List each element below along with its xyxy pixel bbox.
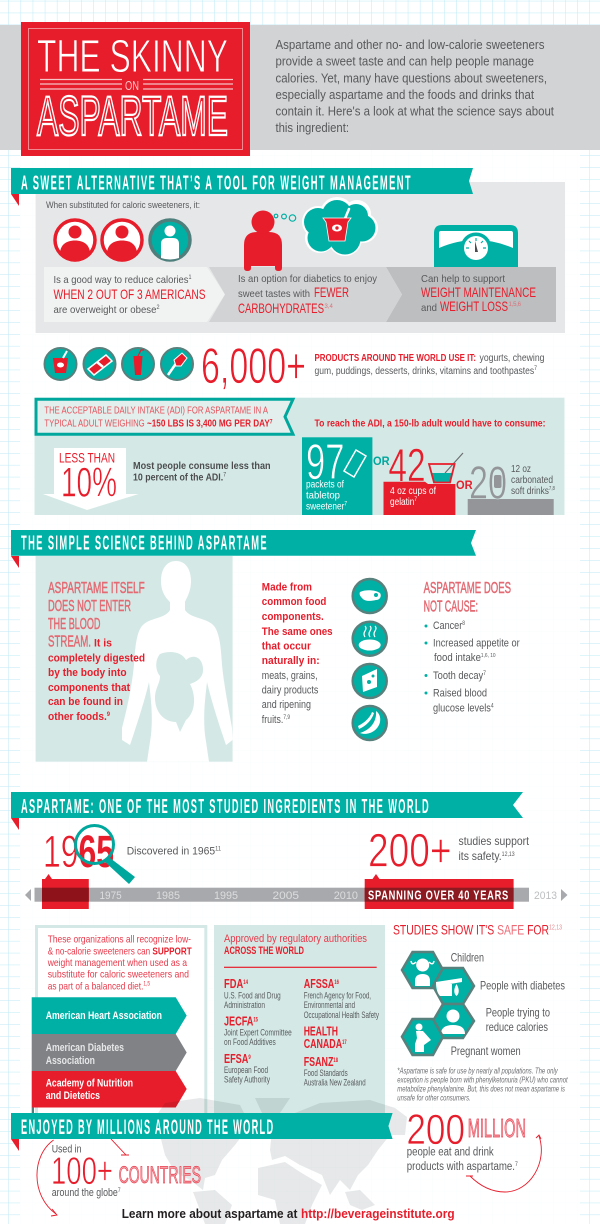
intro text: this ingredient: — [276, 120, 349, 135]
left authorities: 9 — [248, 1055, 251, 1061]
left authorities: U.S. Food and Drug — [224, 991, 281, 1001]
text: aspartame does not cause: Raised blood — [433, 688, 487, 700]
chevron row — [44, 267, 556, 322]
box: 42 cups of gelatin: 7 — [414, 497, 418, 503]
right authorities: 16 — [334, 980, 339, 986]
text: organizations recognize: substitute for caloric sweeteners and — [48, 969, 189, 981]
title box: ON — [125, 78, 139, 93]
text: studies support: its safety. — [458, 849, 508, 863]
stat: 100+ countries: COUNTRIES — [119, 1162, 201, 1189]
text: aspartame does not cause: food intake — [434, 652, 488, 664]
text: studies support — [458, 834, 530, 863]
text: does not enter blood stream: STREAM. — [48, 634, 91, 651]
text: aspartame does not cause: Increased appetite or — [433, 638, 520, 650]
ribbon heading: enjoyed by millions: ENJOYED BY MILLIONS AROUND THE WORLD — [21, 1116, 274, 1139]
text: organizations recognize — [47, 934, 192, 992]
right authorities: Environmental and — [304, 1000, 355, 1010]
text: made from common food components: naturally in: — [262, 655, 320, 667]
arrow: American Diabetes Association — [32, 1034, 187, 1071]
text: diabetics: FEWER — [314, 284, 349, 300]
footnote — [397, 1065, 568, 1102]
right authorities: AFSSA — [304, 976, 348, 991]
text: does not enter blood stream: components that — [48, 682, 130, 694]
box: 20 soft drinks — [468, 456, 555, 515]
text: aspartame does not cause: glucose levels — [433, 703, 502, 715]
header band — [0, 22, 600, 156]
text: aspartame does not cause — [424, 580, 520, 715]
hexagon labels: Children — [451, 951, 484, 965]
text: most people: 7 — [223, 473, 227, 479]
text: made from common food components: fruits. — [262, 714, 289, 726]
text: discovered: 11 — [215, 846, 222, 852]
right authorities: Occupational Health Safety — [304, 1010, 379, 1020]
box: 42 cups of gelatin: 42 — [388, 439, 426, 491]
icon: chewing gum — [84, 348, 116, 380]
icon: meat — [353, 579, 387, 613]
text: weight maintenance: 1,5,6 — [508, 302, 522, 308]
footer link: http://beverageinstitute.org — [301, 1206, 455, 1221]
text: made from common food components: common food — [262, 596, 326, 608]
box: 97 packets: 97 — [306, 434, 344, 490]
icon: diabetes hexagon — [433, 968, 474, 1004]
marker: spanning over 40 years — [365, 874, 514, 909]
title box — [21, 22, 250, 156]
text: diabetics — [238, 273, 378, 316]
text: diabetics: sweet tastes with — [238, 288, 310, 300]
arrow: Academy of Nutrition and Dietetics — [32, 1071, 187, 1108]
left authorities: Administration — [224, 1000, 265, 1010]
ADI ribbon — [36, 399, 293, 434]
text: weight maintenance: and — [421, 302, 437, 314]
hexagon labels: reduce calories — [486, 1020, 548, 1034]
footer link: Learn more about aspartame at — [122, 1206, 298, 1221]
text: products: gum, puddings, desserts, drinks, vitamins and toothpastes — [314, 366, 572, 377]
panel: weight management — [36, 182, 565, 333]
box: 42 cups of gelatin: 4 oz cups of — [390, 485, 436, 497]
arrow: less than 10% — [43, 448, 138, 510]
timeline years: 1975 — [100, 890, 122, 902]
right authorities: HEALTH — [304, 1024, 338, 1039]
box: 20 soft drinks: carbonated — [511, 474, 553, 486]
arrow: less than 10%: LESS THAN — [59, 450, 115, 466]
footnote: unsafe for other consumers. — [397, 1092, 471, 1102]
timeline — [25, 824, 568, 909]
right authorities: French Agency for Food, — [304, 991, 371, 1001]
stat: 200 million — [406, 1106, 541, 1192]
text: made from common food components: The same ones — [262, 626, 333, 638]
text: studies support: studies support — [458, 834, 530, 848]
intro line: When substituted for caloric sweeteners, it: — [46, 200, 200, 211]
hexagon labels: Pregnant women — [451, 1044, 521, 1058]
text: aspartame does not cause: Tooth decay — [433, 670, 492, 682]
text: most people: 10 percent of the ADI. — [133, 472, 241, 484]
text: does not enter blood stream: DOES NOT ENTER — [48, 598, 131, 615]
intro text — [276, 37, 554, 135]
ribbon heading: most studied — [11, 792, 523, 830]
text: most people: Most people consume less than — [133, 460, 271, 472]
timeline years — [100, 890, 557, 902]
text: aspartame does not cause: 7 — [483, 671, 487, 677]
intro text: especially aspartame and the foods and drinks that — [276, 87, 534, 102]
text: does not enter blood stream — [48, 580, 145, 723]
panel: regulatory authorities — [214, 925, 385, 1115]
timeline years: 1985 — [156, 890, 180, 902]
box: 97 packets: 7 — [344, 502, 348, 508]
icon: yogurt — [44, 348, 76, 380]
text: made from common food components: components. — [262, 611, 324, 623]
ribbon heading: sweet alternative — [11, 168, 473, 206]
left authorities: EFSA — [224, 1051, 259, 1066]
text: made from common food components — [262, 582, 333, 726]
text: organizations recognize: & no-calorie sweeteners can SUPPORT — [48, 945, 192, 957]
right authorities: Food Standards — [304, 1068, 348, 1078]
box: 20 soft drinks: 7,8 — [549, 486, 555, 492]
stat: 100+ countries: Used in — [52, 1143, 82, 1155]
icon: toothbrush — [161, 348, 193, 380]
text: diabetics: CARBOHYDRATES — [238, 300, 324, 316]
icon: drink — [122, 348, 154, 380]
text: weight maintenance: WEIGHT MAINTENANCE — [421, 284, 536, 300]
text: does not enter blood stream: can be found in — [48, 696, 123, 708]
text: aspartame does not cause: ASPARTAME DOES — [424, 580, 511, 597]
intro text: Aspartame and other no- and low-calorie sweeteners — [276, 37, 545, 52]
text: products: yogurts, chewing — [480, 353, 544, 364]
panel: body silhouette — [36, 556, 233, 762]
label: or: OR — [373, 454, 390, 468]
arrow: American Diabetes Association: Association — [46, 1055, 95, 1067]
text: organizations recognize: weight management when used as a — [47, 957, 187, 969]
heading: studies show: STUDIES SHOW IT'S SAFE FOR — [393, 921, 558, 937]
label: or: OR — [456, 478, 473, 492]
left authorities: on Food Additives — [224, 1037, 276, 1047]
stat: 200+: 200+ — [368, 824, 452, 877]
heading: approved: ACROSS THE WORLD — [224, 945, 304, 957]
stat: 200 million: MILLION — [468, 1113, 526, 1143]
stat: 200 million: 200 — [406, 1106, 465, 1154]
right authorities: 18 — [333, 1058, 338, 1064]
text: aspartame does not cause: 8 — [462, 621, 466, 627]
box: 97 packets: sweetener — [306, 500, 354, 512]
box: 20 soft drinks: soft drinks — [511, 485, 559, 497]
box: 97 packets — [302, 434, 372, 515]
ribbon heading: simple science: THE SIMPLE SCIENCE BEHIND ASPARTAME — [21, 532, 268, 554]
left authorities: 14 — [243, 980, 248, 986]
footer link — [122, 1206, 455, 1221]
text: made from common food components: dairy products — [262, 685, 319, 697]
left authorities: Joint Expert Committee — [224, 1028, 292, 1038]
arrow: Academy of Nutrition and Dietetics: Academy of Nutrition — [46, 1078, 133, 1090]
text: reduce calories — [54, 274, 206, 316]
stat: 6,000+: 6,000+ — [201, 338, 306, 394]
text: does not enter blood stream: It is — [94, 638, 112, 650]
text: organizations recognize: 1,5 — [143, 981, 151, 987]
left authorities — [224, 976, 292, 1085]
ribbon heading: enjoyed by millions — [11, 1113, 393, 1151]
marker: spanning over 40 years: SPANNING OVER 40 YEARS — [368, 888, 509, 902]
title box: THE SKINNY — [37, 30, 228, 82]
box: 20 soft drinks: 20 — [469, 456, 507, 508]
timeline bar — [34, 888, 529, 902]
left authorities: Safety Authority — [224, 1075, 270, 1085]
hexagon labels — [451, 951, 565, 1058]
text: does not enter blood stream: by the body into — [48, 667, 127, 679]
box: 20 soft drinks: 12 oz — [511, 463, 531, 475]
text: reduce calories: WHEN 2 OUT OF 3 AMERICANS — [54, 286, 206, 302]
right authorities — [304, 976, 379, 1088]
body figure — [122, 561, 233, 762]
text: weight maintenance — [421, 273, 536, 314]
ribbon heading: simple science — [11, 530, 476, 568]
icon: bread — [353, 622, 387, 656]
icon: bananas — [353, 706, 387, 740]
box: 42 cups of gelatin — [384, 439, 463, 515]
text: weight maintenance: WEIGHT LOSS — [440, 298, 508, 314]
text: diabetics: 3,4 — [324, 304, 334, 310]
text: made from common food components: and ripening — [262, 699, 311, 711]
text: made from common food components: 7,9 — [283, 715, 291, 721]
text: reduce calories: 1 — [189, 275, 192, 281]
intro text: calories. Yet, many have questions about sweeteners, — [276, 70, 547, 85]
world map — [150, 1098, 407, 1224]
text: aspartame does not cause: 4 — [491, 704, 494, 710]
right authorities: FSANZ — [304, 1054, 347, 1069]
stat: 200 million: people eat and drink — [407, 1147, 494, 1159]
text: studies support: 12,13 — [502, 852, 515, 858]
text: reduce calories: are overweight or obese — [54, 304, 166, 316]
text: diabetics: Is an option for diabetics to enjoy — [238, 273, 378, 285]
stat: 100+ countries — [37, 1139, 201, 1216]
timeline years: 2005 — [272, 890, 299, 902]
icon: cheese — [353, 664, 387, 698]
timeline years: 2010 — [334, 890, 358, 902]
ADI ribbon: 7 — [270, 420, 273, 426]
ADI ribbon: TYPICAL ADULT WEIGHING — [44, 418, 145, 430]
products row — [44, 338, 544, 394]
text: organizations recognize: These organizations all recognize low- — [48, 934, 191, 946]
icon: person hexagon — [433, 1004, 474, 1038]
text: aspartame does not cause: 1,6, 10 — [481, 653, 496, 659]
icon: two of three people — [55, 220, 190, 262]
text: made from common food components: meats, grains, — [262, 670, 318, 682]
timeline years: 1995 — [214, 890, 238, 902]
text: does not enter blood stream: completely digested — [48, 653, 145, 665]
text: reduce calories: 2 — [156, 305, 160, 311]
left authorities: JECFA — [224, 1014, 266, 1029]
text: most people — [133, 460, 271, 484]
panel: acceptable daily intake — [34, 398, 564, 515]
text: made from common food components: Made from — [262, 582, 312, 594]
stat: 100+ countries: 7 — [118, 1188, 121, 1194]
intro text: provide a sweet taste and can help people manage — [276, 54, 534, 69]
arrow: Academy of Nutrition and Dietetics: and Dietetics — [46, 1090, 100, 1102]
text: weight maintenance: Can help to support — [421, 273, 505, 285]
text: reduce calories: Is a good way to reduce calories — [54, 274, 204, 286]
intro text: contain it. Here's a look at what the science says about — [276, 104, 554, 119]
text: does not enter blood stream: 9 — [107, 712, 111, 718]
stat: 100+ countries: around the globe — [52, 1187, 134, 1199]
arrow: American Diabetes Association: American Diabetes — [46, 1042, 124, 1054]
text: products: PRODUCTS AROUND THE WORLD USE IT: — [314, 353, 476, 364]
box: 42 cups of gelatin: gelatin — [390, 496, 421, 508]
text: does not enter blood stream: ASPARTAME ITSELF — [48, 580, 145, 597]
stat: 200 million: products with aspartame. — [407, 1161, 535, 1173]
text: products: 7 — [534, 366, 538, 372]
ADI ribbon: ~150 LBS IS 3,400 MG PER DAY — [147, 419, 298, 430]
arrow: less than 10%: 10% — [61, 459, 117, 506]
hexagon labels: People trying to — [486, 1006, 550, 1020]
stat: 1965 with magnifier: 1965 — [43, 826, 114, 877]
text: aspartame does not cause: Cancer — [433, 620, 468, 632]
icon: scale — [434, 225, 518, 267]
icon: person thinking of drink — [244, 197, 378, 271]
right authorities: Australia New Zealand — [304, 1078, 366, 1088]
left authorities: European Food — [224, 1065, 268, 1075]
box: 97 packets: tabletop — [306, 490, 340, 502]
right authorities: CANADA — [304, 1036, 360, 1051]
box: 97 packets: packets of — [306, 479, 344, 491]
text: organizations recognize: as part of a balanced diet. — [48, 980, 169, 992]
heading: approved — [224, 933, 367, 957]
title box: ASPARTAME — [37, 84, 228, 147]
text: aspartame does not cause: NOT CAUSE: — [424, 599, 478, 616]
text: made from common food components: that occur — [262, 641, 312, 653]
left authorities: 15 — [253, 1018, 258, 1024]
arrow: American Heart Association: American Heart Association — [46, 1010, 162, 1022]
heading: to reach the ADI: To reach the ADI, a 150-lb adult would have to consume: — [314, 418, 546, 430]
stat: 200 million: 7 — [515, 1162, 518, 1168]
icon: pregnant hexagon — [402, 1019, 443, 1055]
heading: studies show: 12,13 — [549, 924, 562, 931]
right authorities: 17 — [342, 1040, 347, 1046]
organs — [155, 652, 203, 732]
icon: child hexagon — [402, 952, 443, 988]
panel: organizations — [32, 926, 206, 1116]
text: does not enter blood stream: THE BLOOD — [48, 616, 100, 633]
ADI ribbon: THE ACCEPTABLE DAILY INTAKE (ADI) FOR ASPARTAME IN A — [44, 405, 268, 417]
text: products — [314, 353, 544, 377]
timeline years: 2013 — [534, 890, 557, 902]
marker: 1965 — [42, 874, 89, 909]
panel: safe for — [393, 921, 568, 1102]
hexagon labels: People with diabetes — [480, 978, 565, 992]
arrow: American Heart Association — [32, 997, 187, 1034]
text: does not enter blood stream: other foods. — [48, 711, 112, 723]
text: discovered: Discovered in 1965 — [127, 845, 221, 857]
left authorities: FDA — [224, 976, 251, 991]
stat: 100+ countries: 100+ — [51, 1150, 113, 1193]
heading: approved: Approved by regulatory authorities — [224, 933, 367, 945]
